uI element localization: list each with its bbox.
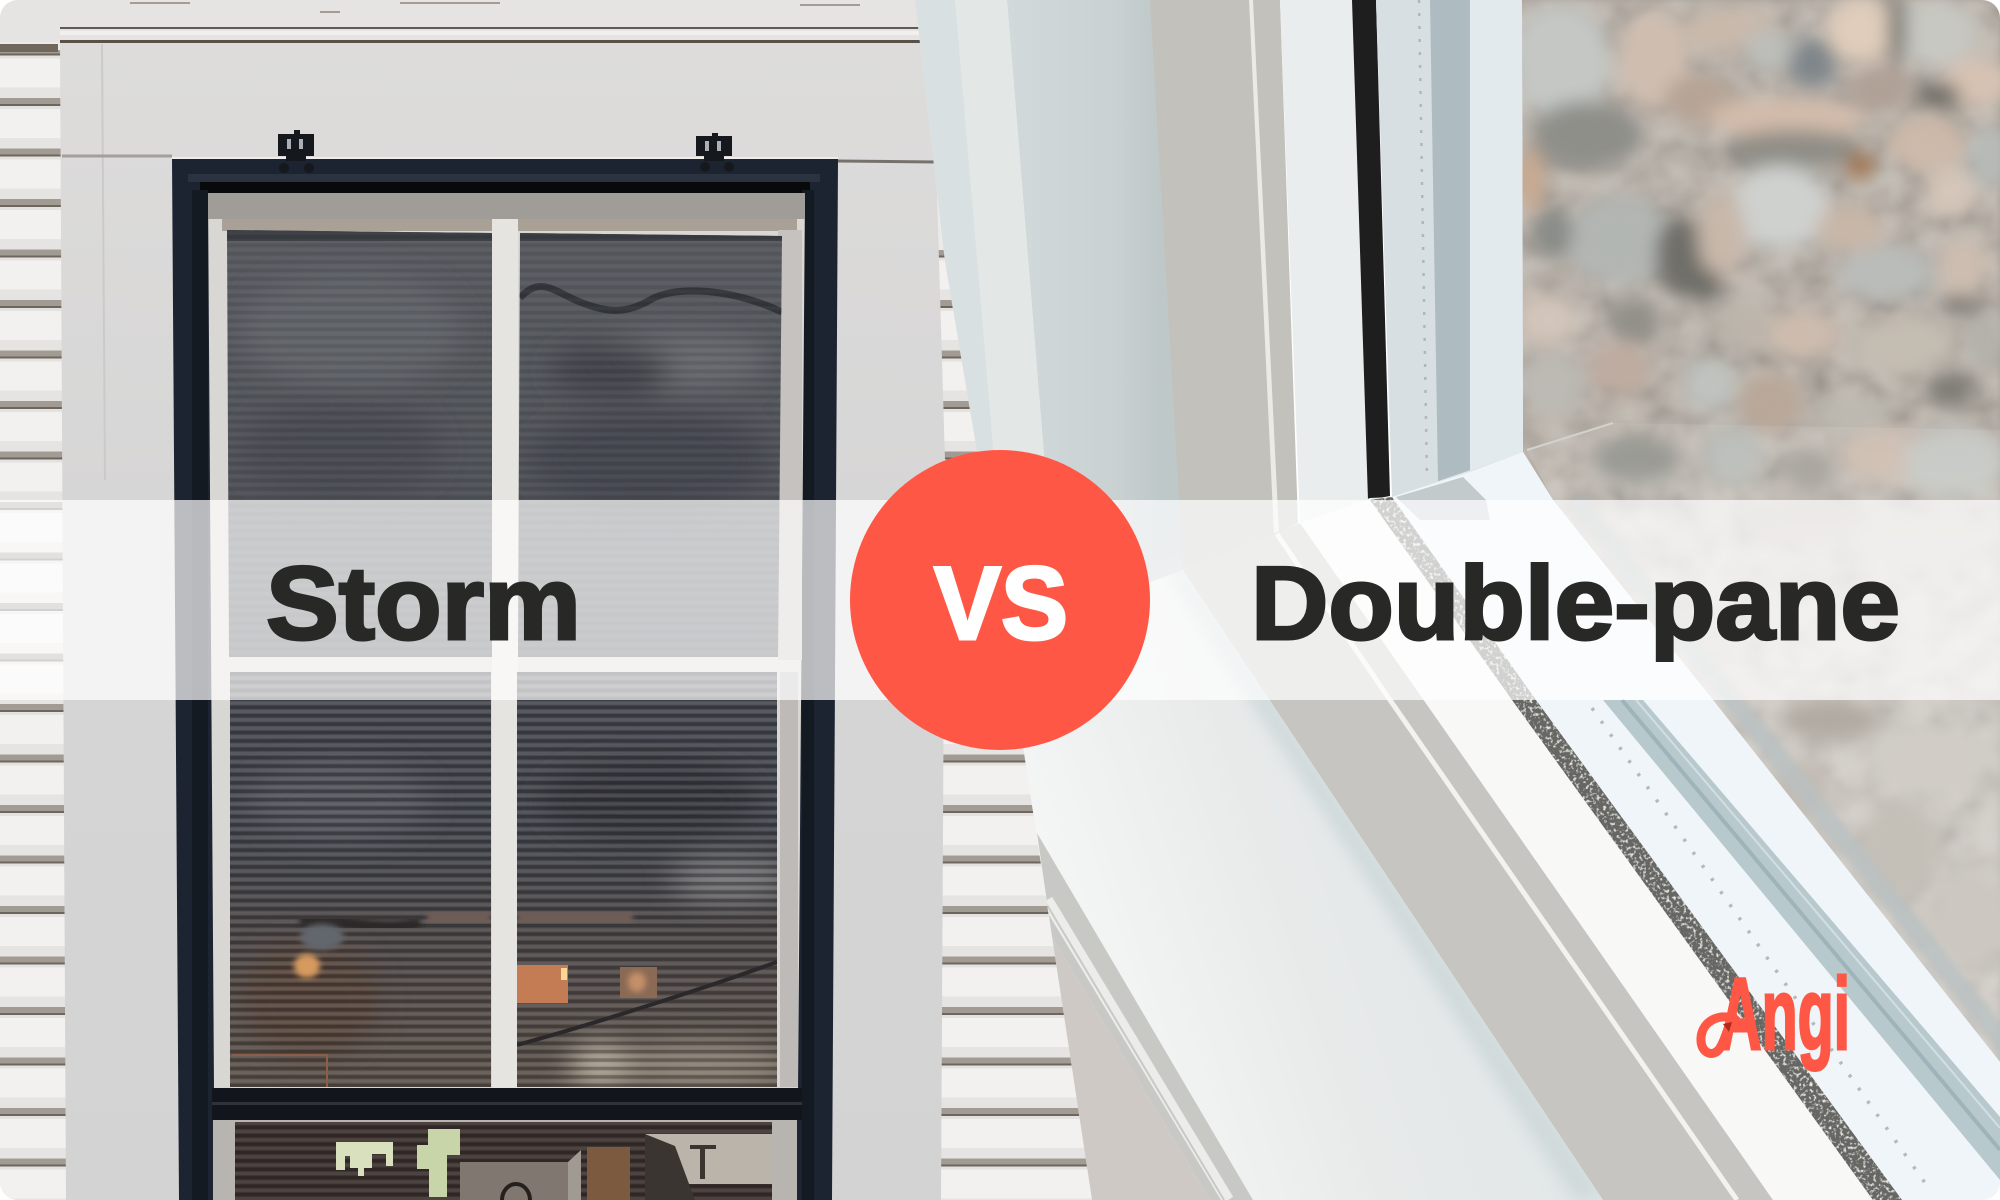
lower sill trim (1037, 833, 1253, 1200)
white upright frame (1280, 0, 1370, 525)
lower window panes (225, 672, 790, 1092)
reflections and lights (232, 913, 657, 1087)
shadow along outer glass edge (1575, 500, 2000, 1050)
painted trim (60, 43, 945, 1200)
grey-beige frame strip (1150, 0, 1298, 570)
VS badge (850, 450, 1150, 750)
white sill band (1367, 498, 1873, 1200)
grey sill band (1183, 523, 1773, 1200)
bottom sash (213, 1120, 797, 1200)
window hinge clips (278, 130, 734, 173)
Angi logo (1701, 957, 1850, 1071)
heading: Storm: Storm (266, 546, 581, 662)
glass reflection edge (1527, 423, 1613, 450)
trim seams (62, 44, 936, 480)
Angi logo: Angi (1719, 957, 1850, 1071)
photo: storm window (0, 0, 1100, 1200)
blurred stone background (1500, 0, 2000, 1080)
bluish shadow on sill (1247, 700, 1598, 1200)
black window frame (172, 159, 838, 1200)
insulated glass edge upright (1352, 0, 1523, 499)
VS badge: VS (934, 546, 1068, 662)
meeting rail (212, 1088, 802, 1120)
clapboard siding (0, 50, 1100, 1200)
top cornice (0, 0, 930, 52)
speckled gasket (1370, 497, 1902, 1200)
thin white sill line (1277, 534, 1737, 1200)
white window sill (1024, 470, 1926, 1200)
upper window panes (220, 225, 790, 665)
translucent title band (0, 500, 2000, 700)
screen sash (208, 193, 805, 1090)
pale reflection of glass pane (1527, 423, 2000, 1062)
outer glass strip and spacer stripes (1392, 452, 2000, 1200)
photo: double-pane window (900, 0, 2000, 1200)
heading: Double-pane: Double-pane (1251, 546, 1900, 662)
vertical wall of frame (915, 0, 1183, 582)
